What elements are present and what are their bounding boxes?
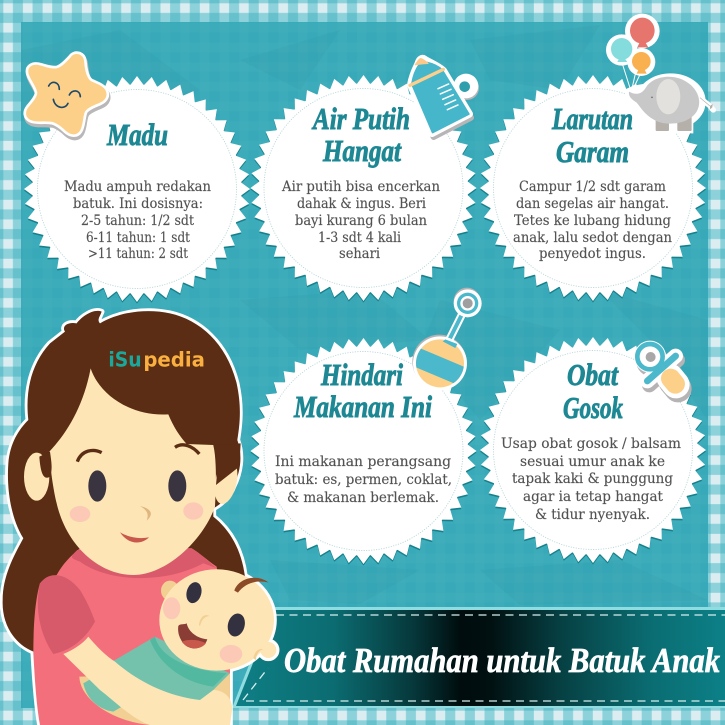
scalloped badge: obat gosok [433,290,725,611]
icon: smiling star [26,54,108,137]
heading: hindari makanan ini: Hindari [320,357,403,392]
ears [24,453,241,506]
heading: obat gosok: Gosok [563,390,623,425]
logo: isupedia: pedia [143,348,205,372]
text: larutan garam: dan segelas air hangat. [516,196,669,212]
text: air putih: bayi kurang 6 bulan [295,213,427,229]
panel: air putih hangat [204,28,523,349]
text: madu: batuk. Ini dosisnya: [73,196,203,212]
text: air putih [281,179,440,262]
heading: hindari makanan ini [293,357,432,424]
text: madu: >11 tahun: 2 sdt [88,246,188,262]
text: obat gosok: Usap obat gosok / balsam [501,436,681,452]
shirt [33,548,230,725]
text: larutan garam: Campur 1/2 sdt garam [519,179,666,195]
text: air putih: sehari [339,246,380,262]
text: hindari: Ini makanan perangsang [275,454,451,470]
heading: obat gosok [563,357,623,425]
icon: pacifier [634,341,678,389]
heading: air putih hangat: Hangat [322,133,402,168]
text: madu: Madu ampuh redakan [64,179,211,195]
panel: hindari makanan ini [204,291,523,612]
facial features [70,445,203,543]
white sticker outline [3,311,277,725]
text: hindari: & makanan berlemak. [287,490,439,506]
scalloped badge: larutan garam [433,28,725,349]
title banner [232,607,725,708]
panel: obat gosok [433,290,725,611]
icon: baby bottle [410,59,479,137]
text: hindari: batuk: es, permen, coklat, [275,472,452,488]
scalloped badge: air putih [204,28,523,349]
scalloped badge: hindari [204,291,523,612]
heading: obat gosok: Obat [567,357,619,392]
text: larutan garam: anak, lalu sedot dengan [513,230,672,246]
panel: larutan garam [433,28,725,349]
scalloped badge: madu [0,29,297,350]
logo: isupedia [108,348,205,372]
text: obat gosok: tapak kaki & punggung [512,471,673,487]
sleeve [38,575,95,654]
illustration: mother holding baby [3,311,277,725]
text: air putih: 1-3 sdt 4 kali [318,230,401,246]
face [49,368,216,575]
tan wrap [79,673,230,725]
logo: isupedia: iSu [108,348,142,372]
heading: larutan garam: Larutan [551,101,633,136]
heading: air putih hangat: Air Putih [311,101,410,136]
text: madu [64,179,211,262]
text: obat gosok: sesuai umur anak ke [520,454,665,470]
panel: madu [0,29,297,350]
mother arm [63,637,232,725]
heading: air putih hangat [311,101,410,168]
text: larutan garam: penyedot ingus. [539,246,646,262]
text: air putih: dahak & ingus. Beri [297,196,426,212]
icon: elephant with balloons [606,14,713,133]
text: hindari [275,454,452,506]
heading: larutan garam [551,101,633,169]
hair locks [39,443,241,485]
text: obat gosok [501,436,681,523]
text: obat gosok: & tidur nyenyak. [535,507,650,523]
heading: hindari makanan ini: Makanan Ini [293,389,432,424]
text: madu: 2-5 tahun: 1/2 sdt [81,213,194,229]
back hair [3,311,245,652]
blanket [83,637,230,712]
baby head [159,569,276,671]
text: obat gosok: agar ia tetap hangat [523,489,663,505]
icon: rattle [412,288,482,390]
text: air putih: Air putih bisa encerkan [281,179,440,195]
text: madu: 6-11 tahun: 1 sdt [86,230,190,246]
heading: madu: Madu [106,117,168,152]
shirt collar [72,548,217,578]
heading: larutan garam: Garam [556,134,629,169]
text: larutan garam: Tetes ke lubang hidung [514,213,671,229]
text: larutan garam [513,179,672,262]
